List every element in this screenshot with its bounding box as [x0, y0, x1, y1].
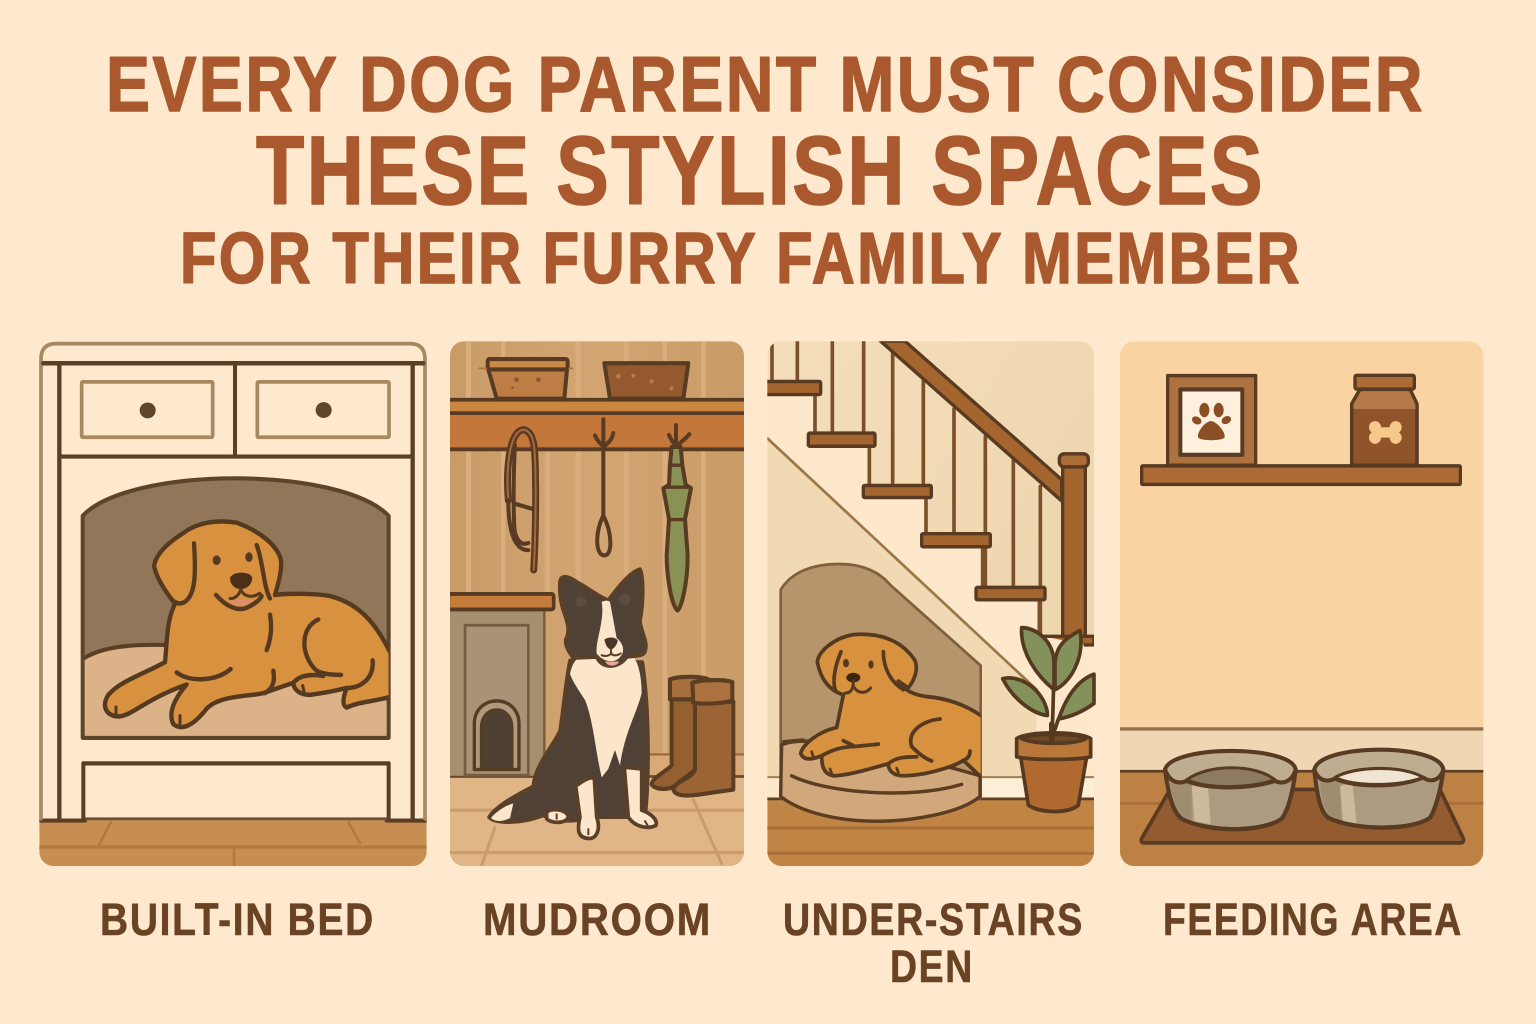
panel: feeding area: [1120, 341, 1483, 866]
border collie: [489, 569, 656, 839]
handrail and newel post: [881, 341, 1094, 645]
potted plant: [1003, 628, 1094, 811]
golden dog lying on bed: [105, 521, 392, 727]
right bowl with milk: [1314, 750, 1443, 828]
label: feeding area: FEEDING AREA: [1163, 894, 1463, 945]
leash: [508, 430, 536, 570]
round dog bed: [781, 740, 980, 821]
label: mudroom: MUDROOM: [483, 894, 712, 945]
drawers: [82, 382, 389, 437]
panel: mudroom: [448, 341, 745, 866]
golden dog in den: [801, 634, 983, 779]
floor: [1120, 771, 1483, 866]
wall shelf: [1142, 466, 1460, 484]
title: [106, 40, 1425, 299]
panel: built-in bed: [39, 342, 427, 866]
storage cabinet with dog door: [448, 594, 554, 776]
balusters and risers: [772, 341, 1040, 635]
hanging loop lead: [595, 419, 613, 555]
title: THESE STYLISH SPACES: [256, 116, 1265, 225]
cabinet frame: [41, 344, 425, 819]
title: FOR THEIR FURRY FAMILY MEMBER: [180, 219, 1302, 299]
wall planks: [466, 341, 706, 754]
label: under-stairs den: UNDER-STAIRS: [783, 894, 1084, 945]
left bowl with water: [1165, 751, 1296, 829]
shelf and hook rail: [450, 400, 744, 449]
wood floor: [767, 799, 1094, 866]
treat jar with bone label: [1352, 375, 1417, 465]
label: under-stairs den: DEN: [890, 941, 974, 992]
bed niche opening: [83, 478, 389, 738]
under-stairs niche: [781, 564, 981, 798]
panel: under-stairs den: [763, 341, 1094, 866]
label: built-in bed: BUILT-IN BED: [100, 894, 375, 945]
rubber boots: [652, 677, 733, 796]
framed paw print: [1168, 376, 1256, 465]
tiled floor: [450, 776, 744, 866]
floor mat: [1141, 790, 1464, 843]
baskets: [479, 359, 688, 399]
baseboard: [1120, 729, 1483, 771]
stair treads: [763, 381, 1045, 600]
label: under-stairs den: [783, 894, 1084, 992]
folded green umbrella: [663, 425, 691, 610]
